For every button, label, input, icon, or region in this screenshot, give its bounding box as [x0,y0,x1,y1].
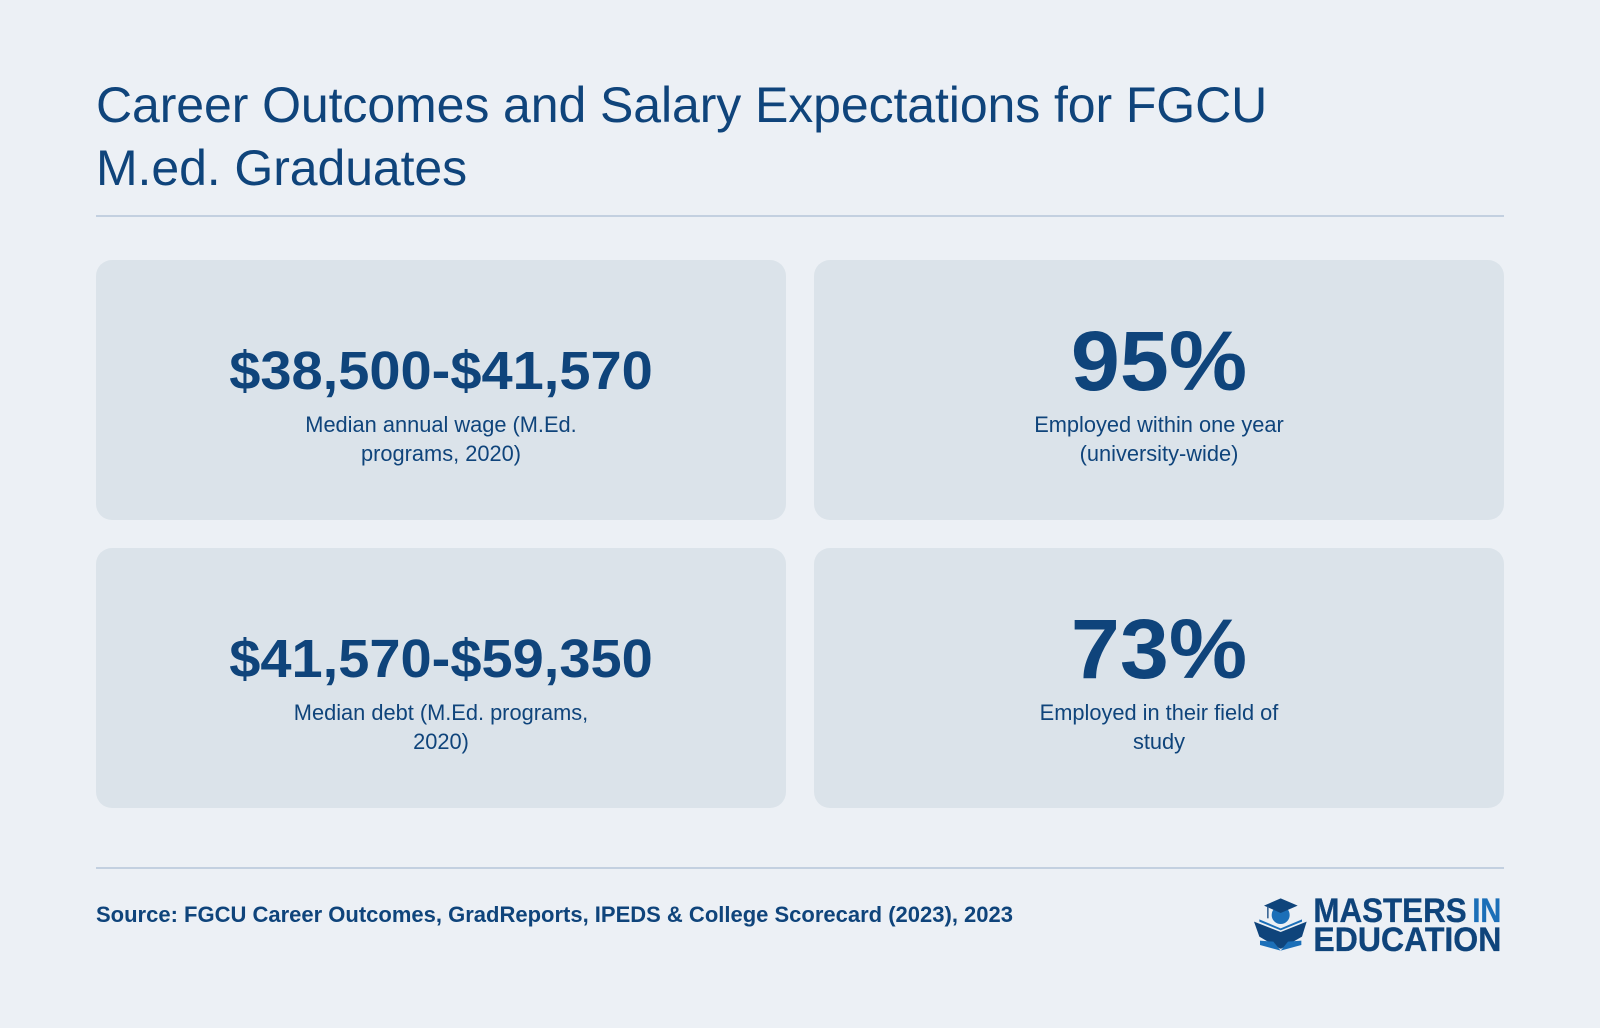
stat label: field of study [1040,700,1278,754]
icon: graduation cap on open book [1254,898,1307,951]
stat label: wage [305,412,577,466]
stat label: field of study: study [1133,729,1185,754]
logo: Masters in Education [1254,892,1501,959]
stat label: debt [294,700,588,754]
wordmark: IN [1472,892,1501,930]
stat label: employment [1034,412,1284,466]
title [96,77,1267,196]
stat label: debt: 2020) [413,729,469,754]
stat label: wage: Median annual wage (M.Ed. [305,412,577,437]
panel: median annual wage [96,260,786,520]
wordmark: EDUCATION [1313,921,1501,959]
stat label: field of study: Employed in their field of [1040,700,1278,725]
panel: median debt [96,548,786,808]
source note: Source: FGCU Career Outcomes, GradReports, IPEDS & College Scorecard (2023), 2023 [96,902,1013,927]
title: Career Outcomes and Salary Expectations for FGCU [96,77,1267,133]
title: M.ed. Graduates [96,140,467,196]
panel: employed within one year [814,260,1504,520]
wordmark [1313,892,1501,959]
stat value: 95%: 95% [1071,314,1247,408]
stat value: debt range: $41,570-$59,350 [229,630,653,689]
panel: employed in field [814,548,1504,808]
stat value: wage range: $38,500-$41,570 [229,342,653,401]
wordmark: MASTERS [1313,892,1467,930]
stat label: debt: Median debt (M.Ed. programs, [294,700,588,725]
stat label: employment: Employed within one year [1034,412,1284,437]
stat label: wage: programs, 2020) [361,441,521,466]
stat label: employment: (university-wide) [1080,441,1238,466]
stat value: 73%: 73% [1071,602,1247,696]
